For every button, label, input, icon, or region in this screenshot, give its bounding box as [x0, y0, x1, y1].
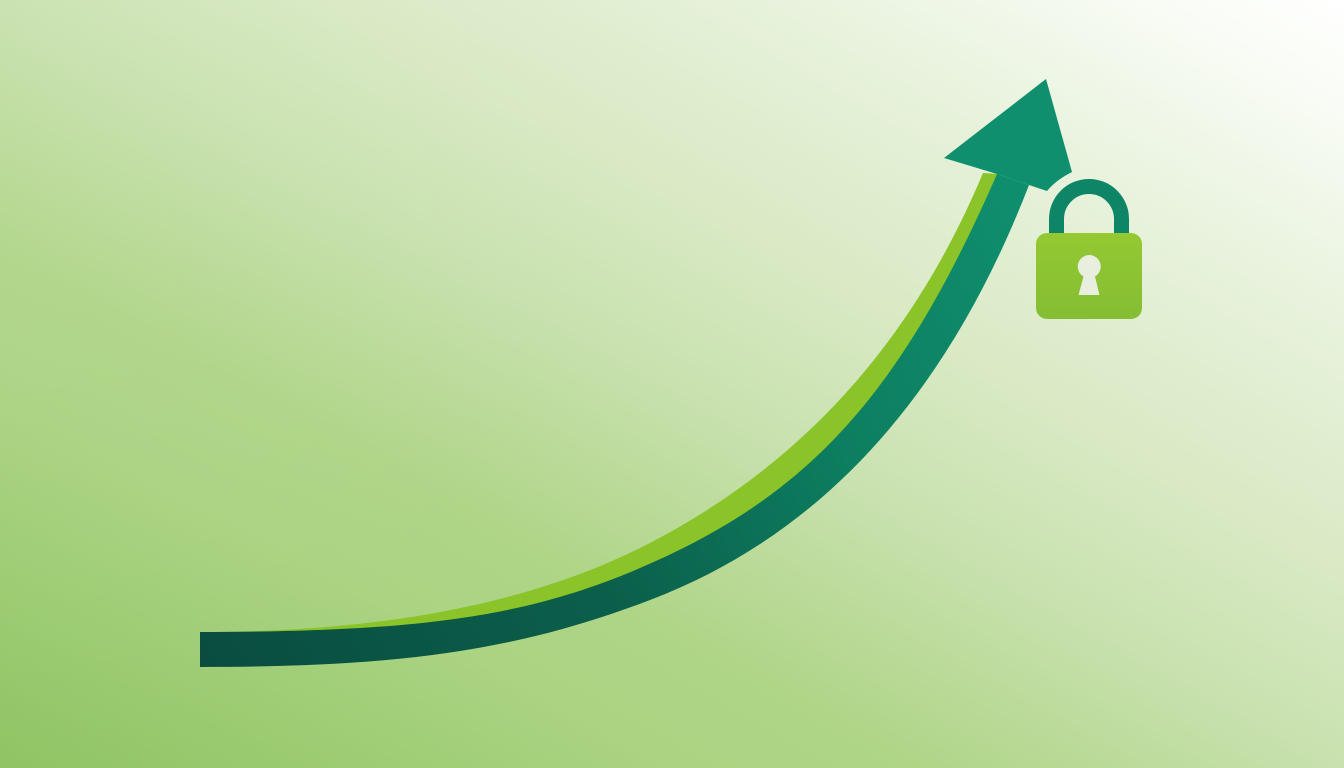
padlock body — [1036, 233, 1142, 319]
icon: rising arrow — [200, 79, 1072, 667]
arrow light green stripe — [200, 173, 1000, 638]
arrow dark shaft — [200, 174, 1029, 667]
padlock keyhole — [1078, 255, 1101, 295]
icon: padlock — [1036, 186, 1142, 319]
padlock shackle — [1056, 186, 1122, 235]
arrowhead — [944, 79, 1072, 191]
